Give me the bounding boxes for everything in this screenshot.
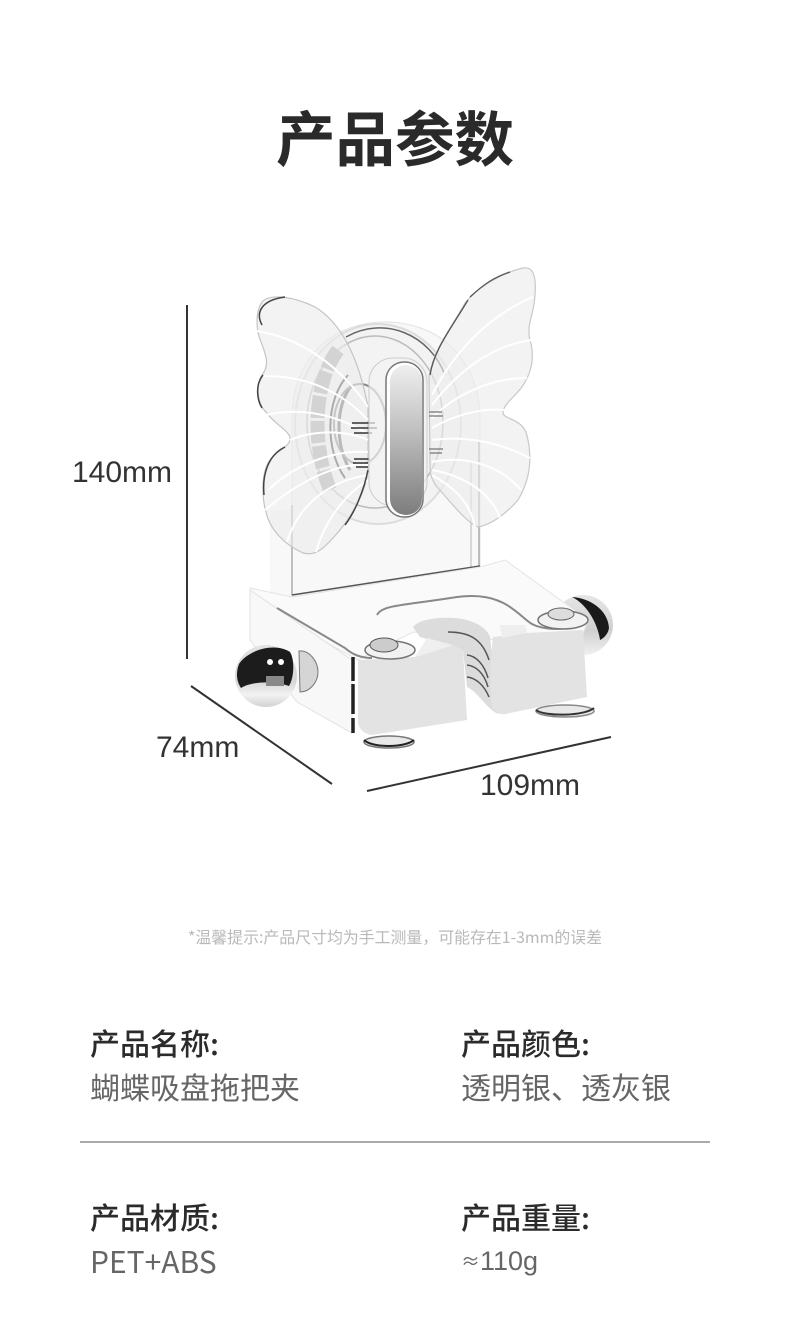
- gray holder: inner patch: [415, 638, 453, 657]
- screws: [364, 608, 594, 748]
- ball connector: [299, 651, 318, 692]
- wing clips: [351, 412, 443, 467]
- gray holder: grooves: [448, 632, 489, 697]
- base left side: [250, 590, 352, 733]
- spec: weight: [461, 1194, 590, 1276]
- right butterfly wing: [429, 268, 535, 527]
- measurement note: *温馨提示:产品尺寸均为手工测量，可能存在1-3mm的误差: [188, 925, 602, 948]
- spec label: 产品颜色:: [461, 1020, 590, 1064]
- spec value: ≈110g: [461, 1246, 538, 1276]
- spec: material: [90, 1194, 219, 1282]
- dimension label: height: 140mm: [72, 456, 172, 489]
- spec: product colour: [461, 1020, 671, 1108]
- spec value: 透明银、透灰银: [461, 1064, 671, 1108]
- spec label: 产品材质:: [90, 1194, 219, 1238]
- title: 产品参数: [276, 93, 514, 179]
- center handle: [369, 358, 427, 517]
- product diagram with dimension lines: [186, 267, 613, 792]
- spec value: 蝴蝶吸盘拖把夹: [90, 1064, 300, 1108]
- gray holder: left block: [358, 645, 467, 735]
- suction cup rings: [295, 324, 461, 524]
- gray holder: curved middle: [413, 618, 498, 714]
- spec label: 产品重量:: [461, 1194, 590, 1238]
- front edge dark strip: [351, 657, 355, 733]
- product: butterfly suction mop holder: [235, 268, 613, 748]
- right chrome ball: [553, 595, 613, 655]
- back plate: [270, 322, 480, 597]
- base top surface: [250, 560, 588, 660]
- dimension label: width: 109mm: [480, 769, 580, 802]
- spec value: PET+ABS: [90, 1238, 217, 1282]
- left butterfly wing: [257, 297, 368, 554]
- left chrome ball: [235, 645, 297, 707]
- dimension line: width: [367, 737, 611, 791]
- dimension label: depth: 74mm: [156, 731, 239, 764]
- dimension line: depth: [191, 686, 332, 784]
- spec label: 产品名称:: [90, 1020, 219, 1064]
- gray holder: right block: [491, 630, 587, 714]
- dimension line: height: [186, 305, 188, 659]
- spec: product name: [90, 1020, 300, 1108]
- gray holder: right inner wall: [500, 625, 527, 638]
- base top edge chrome line: [277, 596, 572, 658]
